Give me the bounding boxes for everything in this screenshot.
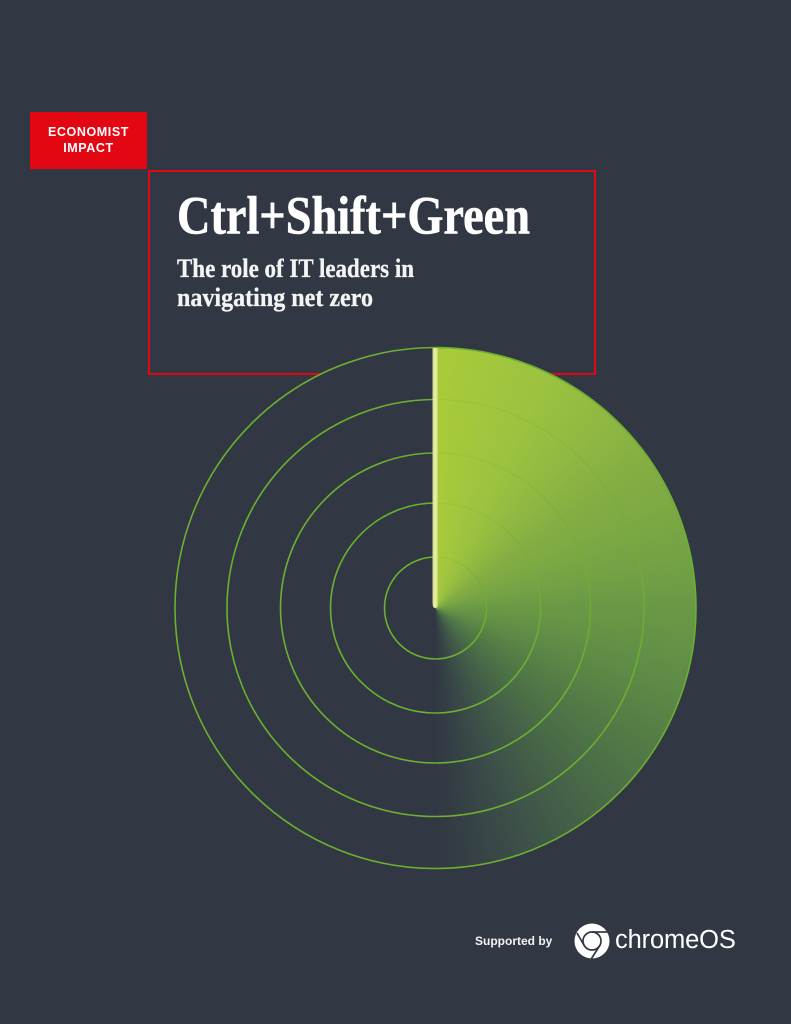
supported by label: Supported by (475, 934, 552, 948)
circle mask over frame (175, 348, 696, 868)
title: Ctrl+Shift+Green (177, 186, 530, 246)
logo: Economist Impact (30, 112, 147, 169)
logo: Economist Impact: ECONOMIST (48, 125, 129, 139)
red title frame (148, 170, 596, 375)
sweep glow softening the rings (177, 350, 694, 866)
gradient quarter sweep (175, 348, 696, 868)
subtitle: navigating net zero (177, 283, 373, 312)
subtitle (177, 254, 414, 312)
chromeOS wordmark: chromeOS (615, 926, 736, 954)
concentric rings (175, 348, 696, 868)
title and subtitle (177, 186, 530, 312)
subtitle: The role of IT leaders in (177, 254, 414, 283)
icon: chrome logo (574, 924, 610, 958)
logo: Economist Impact: IMPACT (63, 140, 114, 154)
